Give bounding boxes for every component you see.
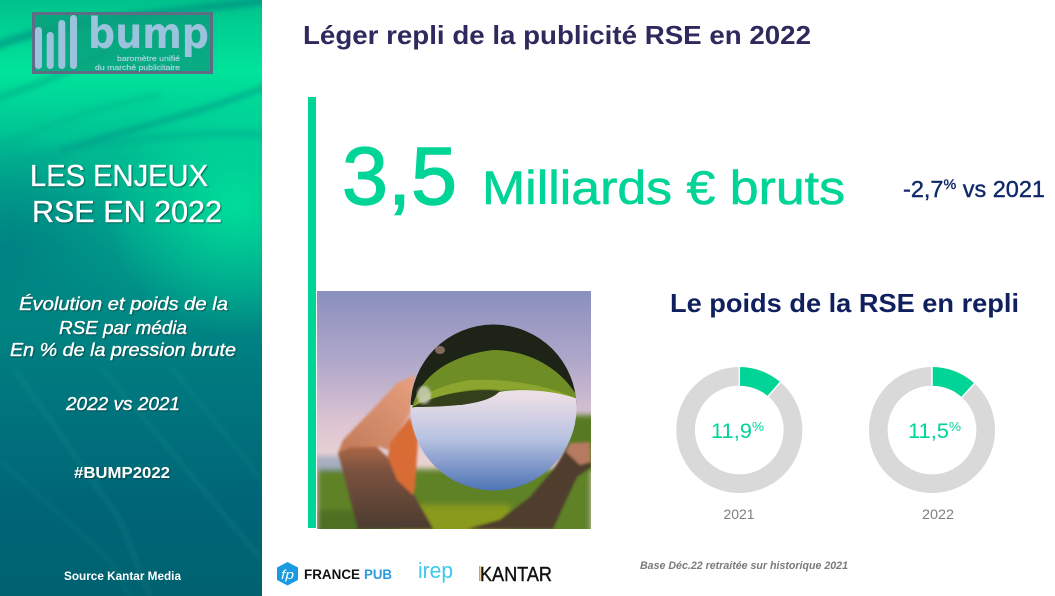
donut chart: 2021 <box>686 367 793 522</box>
donut chart: 2021: 2021 <box>724 506 755 522</box>
logo: France Pub <box>277 562 392 586</box>
logo: France Pub: fp <box>281 567 294 582</box>
footnote: Base Déc.22 retraitée sur historique 2021 <box>640 560 848 572</box>
donut chart: 2022: 11,5 <box>908 420 947 443</box>
logo: France Pub: PUB <box>364 567 392 582</box>
logo: bump: du marché publicitaire <box>95 63 180 72</box>
sidebar heading: RSE EN 2022 <box>32 194 222 229</box>
sidebar subtitle: Évolution et poids de la <box>19 294 228 314</box>
sidebar heading: LES ENJEUX <box>30 158 208 193</box>
variation vs 2021: vs 2021 <box>956 176 1045 202</box>
logo: Kantar: KANTAR <box>480 563 552 586</box>
photo: crystal ball held in hands <box>317 291 591 529</box>
logo: bump: baromètre unifié <box>117 54 180 63</box>
logo: France Pub: FRANCE <box>304 567 360 582</box>
crystal ball <box>410 324 576 490</box>
title: Léger repli de la publicité RSE en 2022 <box>303 20 811 50</box>
key figure: 3,5 milliards: 3,5 <box>342 131 457 222</box>
donut chart: 2022: 2022 <box>922 506 954 522</box>
sidebar period: 2022 vs 2021 <box>65 394 180 414</box>
variation vs 2021: -2,7 <box>903 176 943 202</box>
heading: le poids de la RSE: Le poids de la RSE en repli <box>670 288 1019 318</box>
sidebar subtitle <box>10 294 236 360</box>
accent bar <box>308 97 316 528</box>
key figure: 3,5 milliards <box>342 131 845 222</box>
donut chart: 2022: % <box>949 419 961 434</box>
sidebar subtitle: RSE par média <box>59 318 187 338</box>
sidebar source: Source Kantar Media <box>64 569 181 583</box>
sidebar heading <box>30 158 222 229</box>
donut chart: 2022 <box>878 367 986 522</box>
sidebar subtitle: En % de la pression brute <box>10 340 236 360</box>
variation vs 2021: % <box>943 176 956 192</box>
key figure: 3,5 milliards: Milliards € bruts <box>482 161 845 214</box>
sidebar hashtag: #BUMP2022 <box>74 465 170 482</box>
panel: left sidebar <box>0 0 270 596</box>
logo: bump: bump <box>88 9 209 59</box>
logo: bump <box>34 9 212 72</box>
donut chart: 2021: 11,9 <box>711 420 750 443</box>
logo: irep: irep <box>418 558 453 583</box>
donut chart: 2021: % <box>752 419 764 434</box>
